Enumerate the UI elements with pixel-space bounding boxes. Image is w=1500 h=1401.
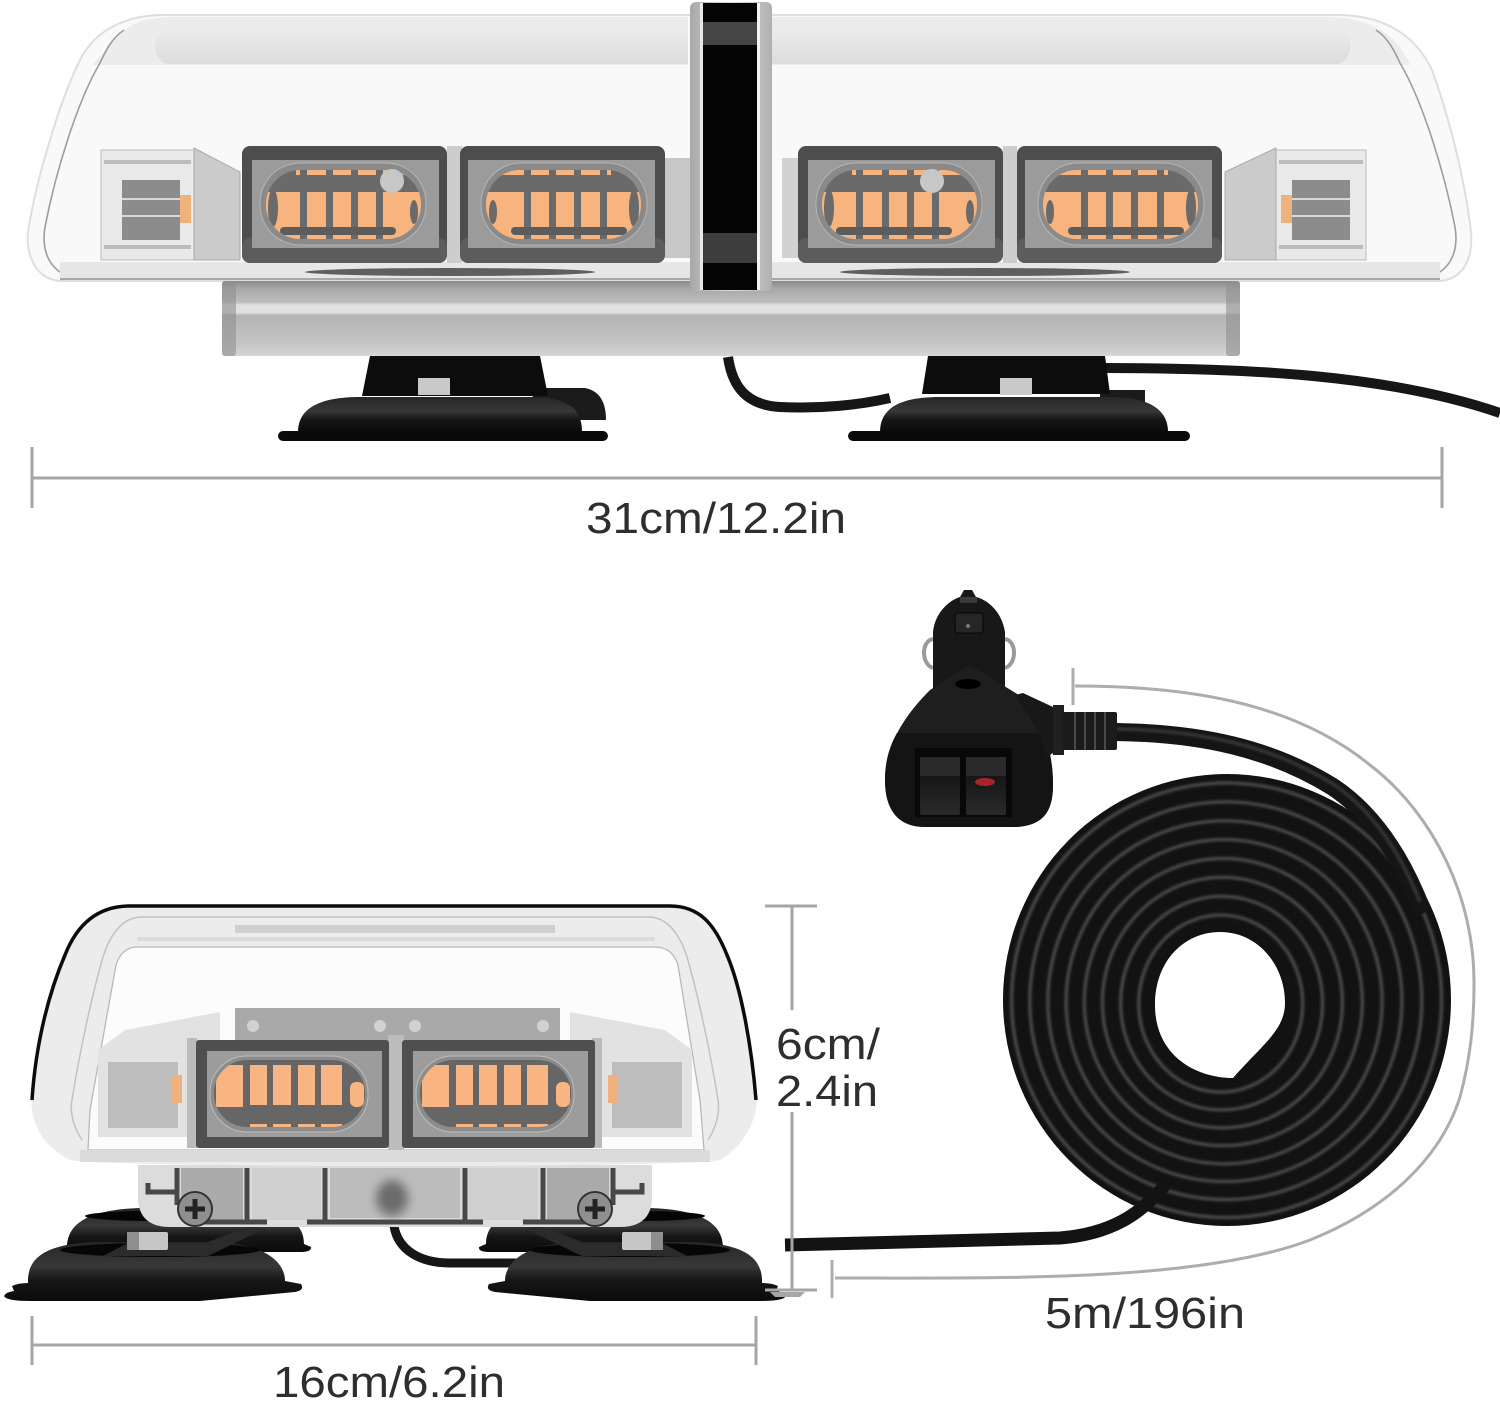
plug vent	[955, 679, 981, 689]
center bracket	[690, 2, 772, 291]
front view light bar	[4, 906, 805, 1301]
plug body	[885, 665, 1053, 827]
width dimension line	[32, 447, 1442, 508]
amber LED modules	[196, 1035, 595, 1150]
connecting cable	[394, 1226, 520, 1263]
end lamps and brackets	[101, 148, 1366, 260]
cable length arc	[832, 668, 1474, 1298]
mounting plate	[138, 1165, 652, 1227]
strain relief	[1015, 693, 1117, 757]
cable length label: 5m/196in	[1045, 1289, 1245, 1338]
cigarette plug with switches	[885, 590, 1117, 827]
base rail	[222, 268, 1240, 356]
plug face	[885, 733, 1053, 827]
amber LED modules	[242, 146, 1222, 263]
rear suction feet	[67, 1208, 723, 1252]
metal clips	[924, 639, 1014, 668]
internal plate and side lamps	[98, 1008, 692, 1148]
power cable	[785, 729, 1420, 1245]
rocker switches	[915, 748, 1012, 817]
height dimension line	[765, 906, 817, 1290]
top view light bar	[28, 2, 1500, 441]
clear dome	[28, 15, 1471, 281]
height label: 6cm/	[776, 1020, 881, 1069]
plug barrel	[933, 590, 1005, 695]
cable coil	[1003, 774, 1451, 1226]
height label: 2.4in	[776, 1067, 878, 1116]
depth dimension line	[32, 1316, 756, 1365]
width label: 31cm/12.2in	[586, 494, 846, 543]
clear dome	[31, 906, 757, 1166]
suction feet	[278, 356, 1190, 441]
cables	[728, 357, 1500, 413]
front suction feet and brackets	[4, 1226, 805, 1301]
